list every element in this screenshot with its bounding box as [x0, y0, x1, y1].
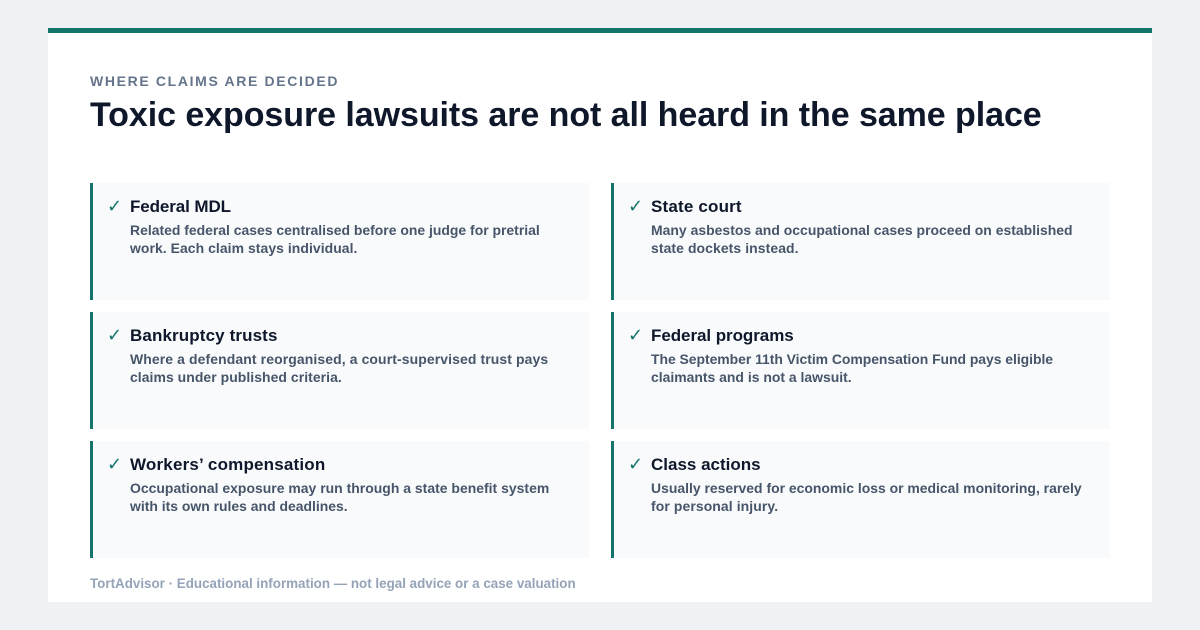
panel: Federal programs [611, 312, 1110, 429]
panel: State court [611, 183, 1110, 300]
card text: for personal injury. [651, 498, 778, 514]
card text [651, 480, 1082, 514]
card text [130, 480, 549, 514]
card text [651, 351, 1053, 385]
eyebrow label: WHERE CLAIMS ARE DECIDED [90, 73, 339, 89]
icon: check: ✓ [628, 196, 643, 216]
panel: Federal MDL [90, 183, 589, 300]
card text: state dockets instead. [651, 240, 799, 256]
card heading: Workers’ compensation [130, 455, 325, 474]
card text [130, 351, 548, 385]
panel: Class actions [611, 441, 1110, 558]
card heading: Class actions [651, 455, 761, 474]
card text: with its own rules and deadlines. [130, 498, 348, 514]
card text: work. Each claim stays individual. [130, 240, 357, 256]
card text [130, 222, 540, 256]
card heading: Federal programs [651, 326, 794, 345]
icon: check: ✓ [628, 454, 643, 474]
accent bar [48, 28, 1152, 33]
card text: Many asbestos and occupational cases proceed on established [651, 222, 1073, 238]
card text: claimants and is not a lawsuit. [651, 369, 852, 385]
card text: Occupational exposure may run through a state benefit system [130, 480, 549, 496]
card text: claims under published criteria. [130, 369, 342, 385]
card text [651, 222, 1073, 256]
card heading: Bankruptcy trusts [130, 326, 278, 345]
icon: check: ✓ [628, 324, 643, 346]
card text: Related federal cases centralised before one judge for pretrial [130, 222, 540, 238]
footer note: TortAdvisor · Educational information — not legal advice or a case valuation [90, 576, 576, 591]
panel: Bankruptcy trusts [90, 312, 589, 429]
card heading: Federal MDL [130, 197, 231, 216]
icon: check: ✓ [107, 324, 122, 346]
panel: Workers' compensation [90, 441, 589, 558]
card text: Usually reserved for economic loss or medical monitoring, rarely [651, 480, 1082, 496]
icon: check: ✓ [107, 196, 122, 216]
card text: Where a defendant reorganised, a court-supervised trust pays [130, 351, 548, 367]
card heading: State court [651, 197, 742, 216]
title: Toxic exposure lawsuits are not all heard in the same place [90, 96, 1042, 134]
icon: check: ✓ [107, 454, 122, 474]
card text: The September 11th Victim Compensation Fund pays eligible [651, 351, 1053, 367]
